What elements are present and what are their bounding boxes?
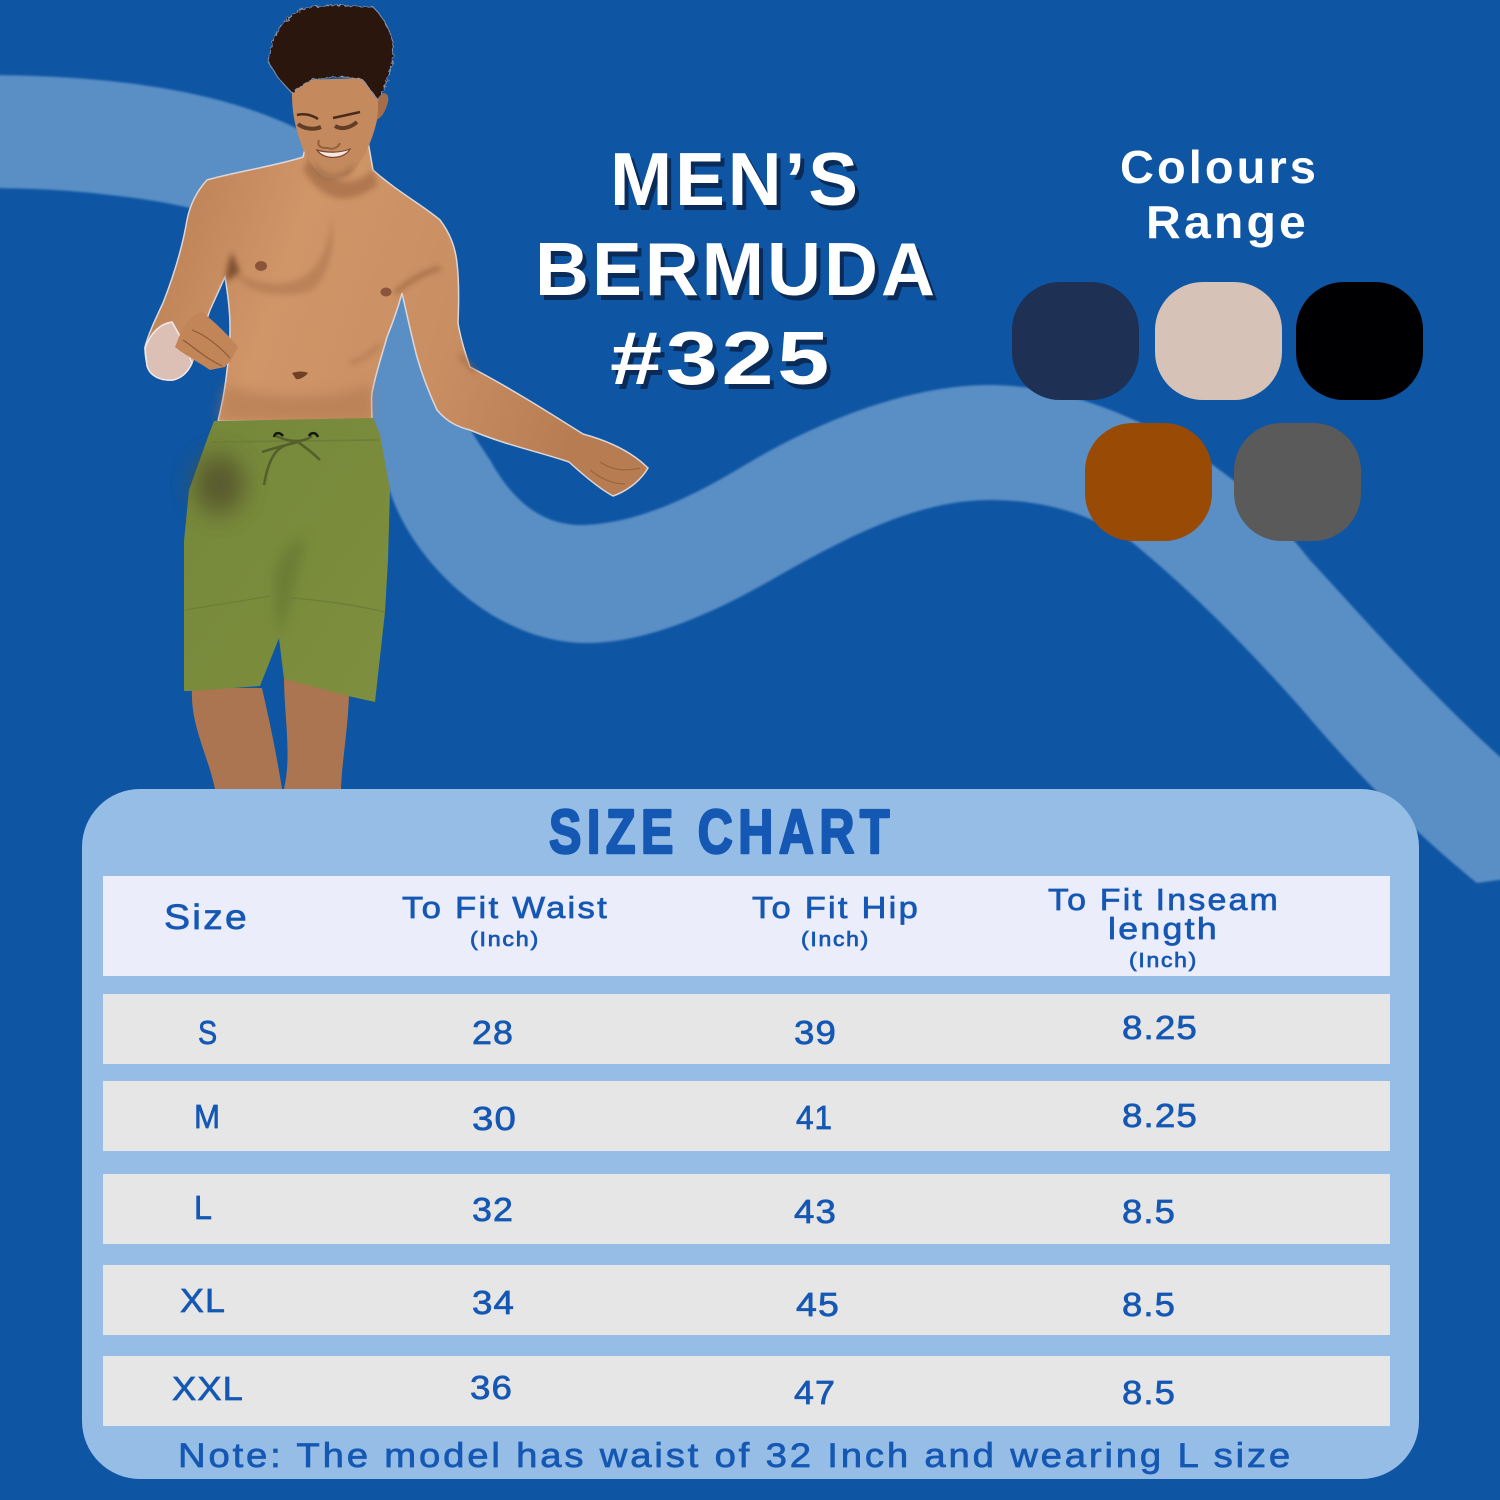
title text: MEN’S — [610, 137, 861, 221]
swatch beige — [1155, 282, 1282, 400]
row XXL — [103, 1356, 1390, 1426]
ear — [375, 93, 388, 120]
row S — [103, 994, 1390, 1064]
footnote: Note: The model has waist of 32 Inch and wearing L size — [178, 1437, 1293, 1475]
table header row: length — [1108, 911, 1219, 946]
left wrist highlight — [145, 322, 192, 380]
row L: 32 — [472, 1191, 514, 1228]
chest and navel marks — [255, 261, 392, 379]
title shadow — [539, 142, 942, 405]
eyes brows and smile — [297, 112, 360, 179]
title shadow: #325 — [614, 321, 837, 405]
swatch rust — [1085, 423, 1212, 541]
row XL — [103, 1265, 1390, 1335]
row M: 41 — [796, 1099, 833, 1136]
title text — [535, 137, 938, 400]
row S: 28 — [472, 1014, 514, 1051]
row S: S — [198, 1014, 218, 1051]
size chart heading: SIZE CHART — [549, 798, 895, 867]
row M: 8.25 — [1122, 1097, 1198, 1134]
right hand fingers — [590, 462, 640, 484]
table header row — [103, 876, 1390, 976]
title shadow: BERMUDA — [539, 232, 942, 316]
title: Men's Bermuda #325 — [535, 137, 942, 405]
neck torso and arms — [145, 130, 648, 496]
table header row: (Inch) — [801, 929, 870, 951]
colour swatches — [1012, 282, 1423, 541]
row L: L — [194, 1189, 213, 1226]
row XL: XL — [180, 1282, 226, 1319]
hair — [268, 6, 393, 100]
colours range heading — [1120, 141, 1319, 248]
row S: 8.25 — [1122, 1009, 1198, 1046]
colours range heading: Range — [1146, 196, 1309, 248]
row L: 43 — [794, 1193, 837, 1230]
body shading — [218, 150, 476, 421]
swatch black — [1296, 282, 1423, 400]
table header row: (Inch) — [470, 929, 540, 951]
row M: 30 — [472, 1100, 517, 1137]
table header row: Size — [164, 898, 249, 937]
title shadow: MEN’S — [614, 142, 865, 226]
table header row: (Inch) — [1129, 950, 1198, 972]
swatch grey — [1234, 423, 1361, 541]
row S: 39 — [794, 1014, 837, 1051]
row XXL: 47 — [794, 1374, 836, 1411]
decorative wave ribbon — [0, 75, 1500, 883]
row L — [103, 1174, 1390, 1244]
row XL: 8.5 — [1122, 1286, 1176, 1323]
bermuda shorts — [184, 418, 390, 702]
left hand — [175, 312, 238, 370]
shorts details — [185, 433, 385, 638]
table header row: To Fit Inseam — [1048, 882, 1280, 917]
row XL: 45 — [796, 1286, 840, 1323]
row XXL: XXL — [172, 1370, 244, 1407]
title text: BERMUDA — [535, 227, 938, 311]
row L: 8.5 — [1122, 1193, 1176, 1230]
title text: #325 — [610, 316, 833, 400]
swatch navy — [1012, 282, 1139, 400]
panel: size chart — [82, 789, 1419, 1479]
row XXL: 8.5 — [1122, 1374, 1176, 1411]
row M: M — [194, 1098, 221, 1135]
row XL: 34 — [472, 1284, 515, 1321]
colours range heading: Colours — [1120, 141, 1319, 193]
table header row: To Fit Hip — [752, 890, 920, 925]
panel background — [82, 789, 1419, 1479]
row XXL: 36 — [470, 1369, 513, 1406]
face — [292, 78, 378, 178]
model photo illustration — [145, 6, 648, 789]
row M — [103, 1081, 1390, 1151]
table header row: To Fit Waist — [402, 890, 609, 925]
legs — [192, 678, 349, 789]
